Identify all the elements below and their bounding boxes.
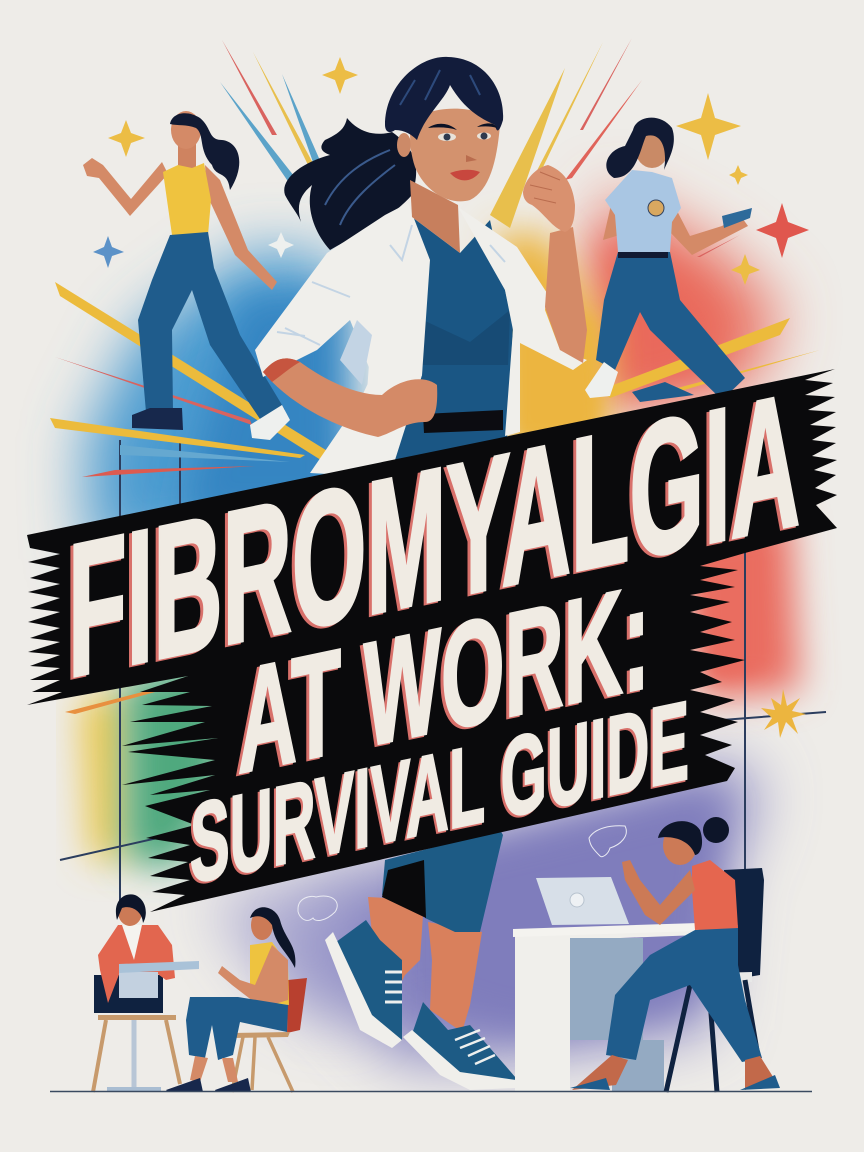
- colour wash: lower: [80, 510, 800, 1060]
- figure: woman in red jacket: [93, 894, 199, 1092]
- central figure legs and sneakers: [325, 830, 516, 1090]
- title line 3: [188, 677, 689, 909]
- ear: [397, 133, 411, 157]
- energy rays: [50, 38, 820, 477]
- blue top: [395, 217, 513, 460]
- figure: woman right with phone: [585, 118, 752, 402]
- facial features: [428, 123, 497, 180]
- title line 1: [65, 353, 800, 720]
- neck: [410, 180, 460, 253]
- black brush banner: [27, 369, 837, 912]
- orange streak: [65, 690, 155, 714]
- central figure: doctor: [255, 57, 587, 478]
- belt: [423, 410, 503, 433]
- floor line: [50, 1090, 812, 1092]
- fist raised: [523, 165, 575, 232]
- burst star right: [761, 689, 806, 738]
- hair cap: [385, 57, 503, 140]
- figure: woman at desk: [570, 817, 780, 1092]
- coat back left sleeve: [255, 203, 430, 478]
- figure: walking woman left: [83, 111, 290, 440]
- laptop: [536, 877, 629, 925]
- coat right panel: [458, 207, 587, 436]
- title: [65, 353, 800, 909]
- arm right: [545, 227, 587, 363]
- structural lines: [60, 440, 826, 910]
- brain doodles: [298, 826, 626, 920]
- arm left and fist: [263, 358, 437, 437]
- colour wash: top: [85, 190, 780, 560]
- sparkle stars top: [93, 57, 809, 285]
- ponytail hair: [284, 118, 416, 250]
- desk with laptop: [513, 877, 700, 1092]
- title line 2: [235, 553, 650, 807]
- head and face: [410, 109, 500, 201]
- figure: woman in yellow top: [166, 907, 307, 1092]
